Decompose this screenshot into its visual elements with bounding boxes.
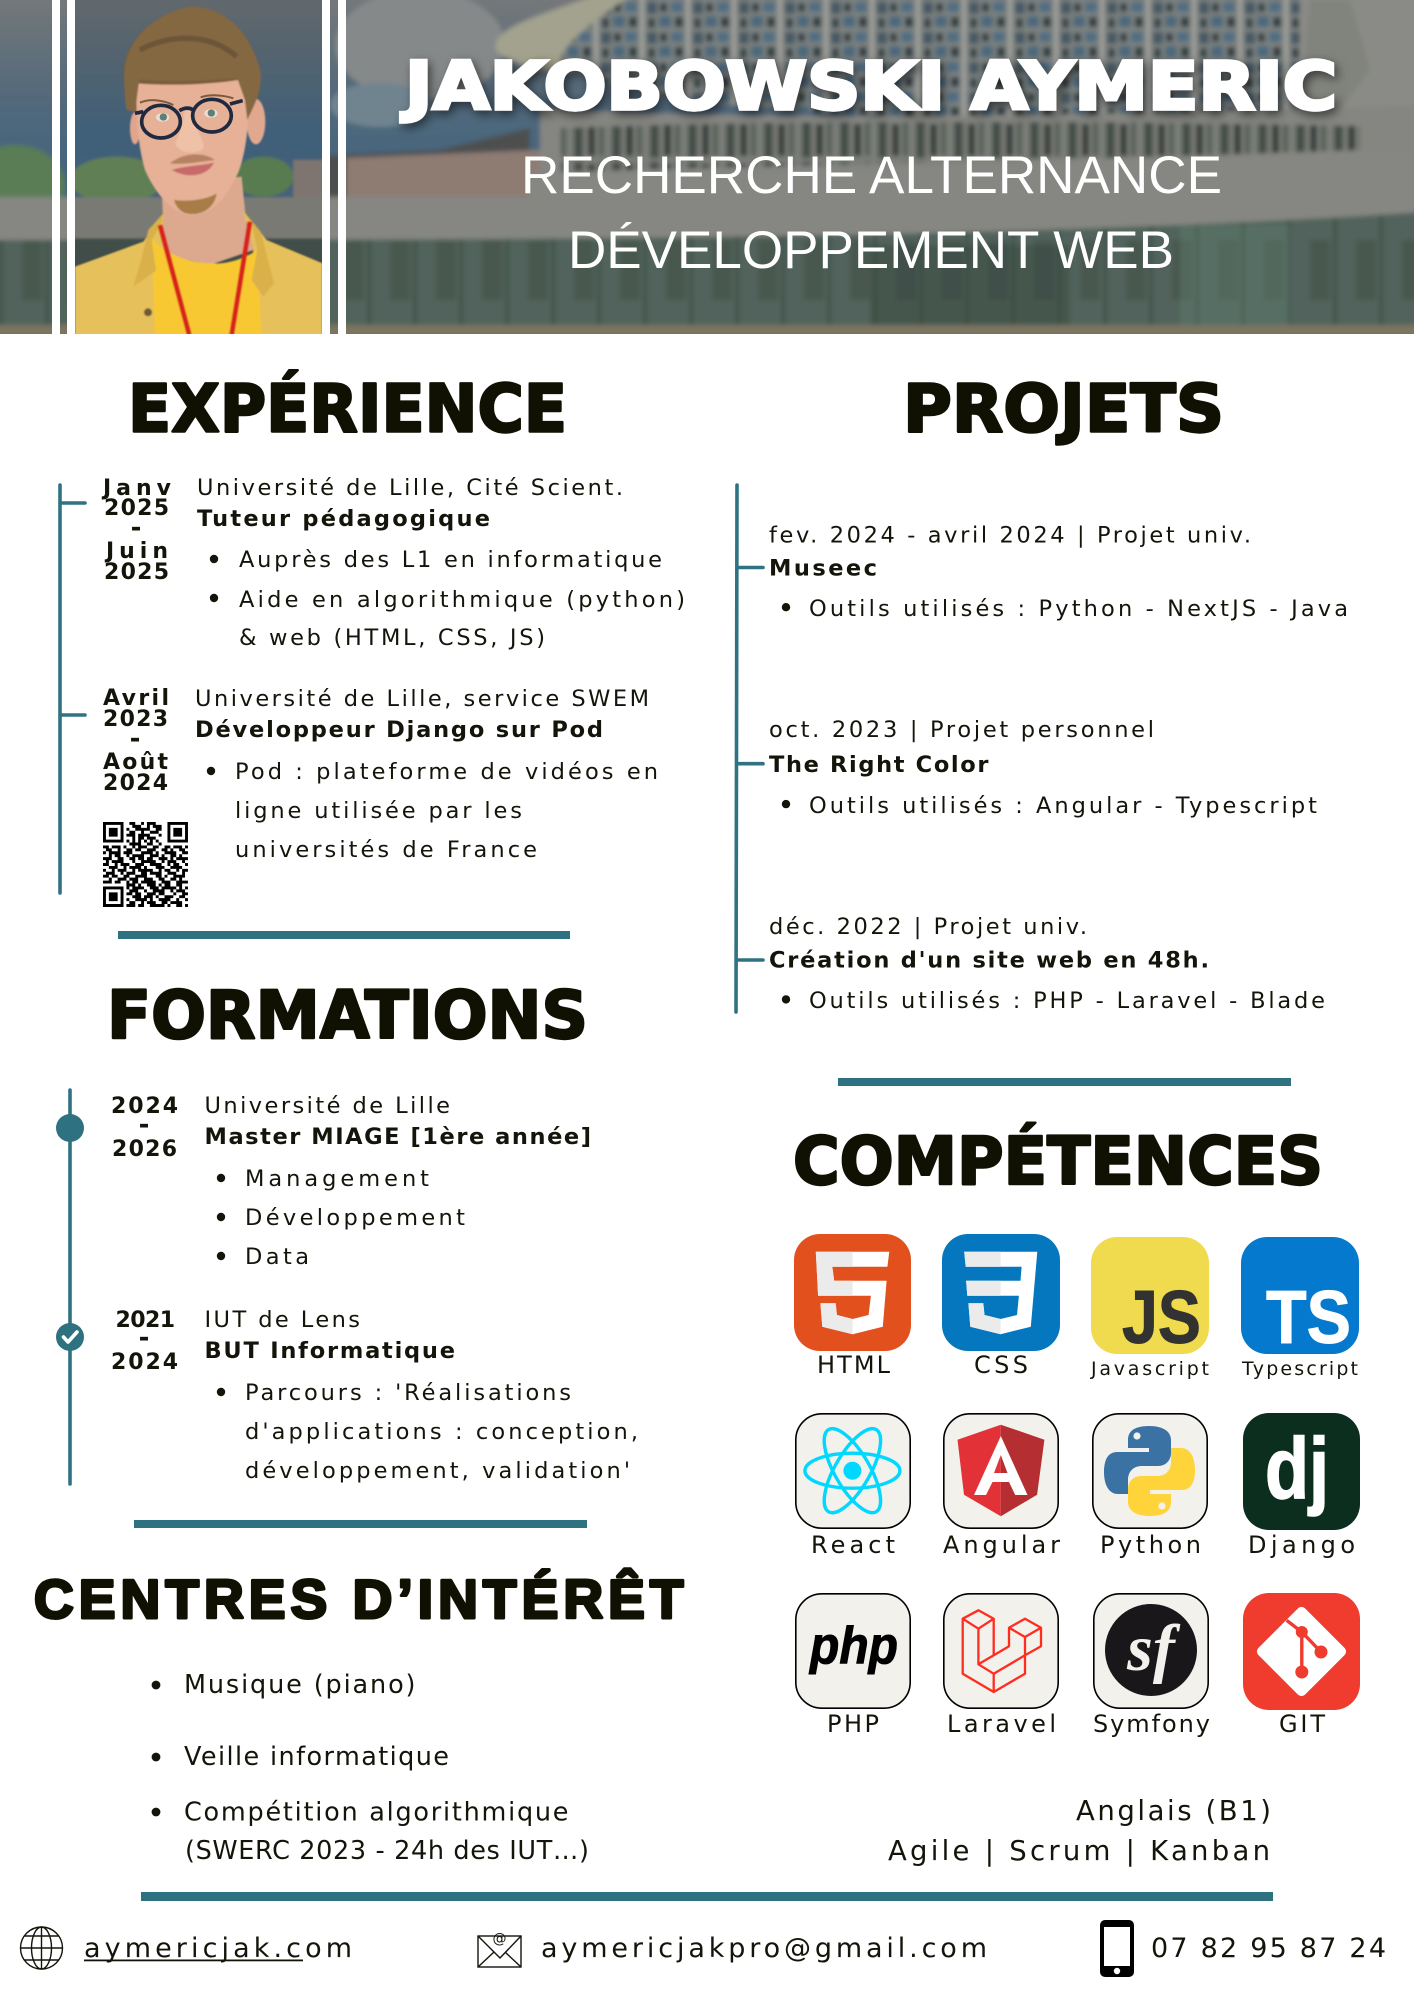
job 2 text: Développeur Django sur Pod [195,717,603,743]
heading: expérience: EXPÉRIENCE [128,370,567,448]
heading: compétences: COMPÉTENCES [793,1122,1323,1200]
heading: centres d'intérêt: CENTRES D’INTÉRÊT [34,1568,684,1630]
project: site web 48h: Outils utilisés : PHP - Laravel - Blade [809,988,1325,1014]
icon labels: Python [1100,1531,1201,1559]
languages and methods: Agile | Scrum | Kanban [888,1835,1270,1867]
BUT text [204,1307,638,1484]
name title: JAKOBOWSKI AYMERIC [401,48,1337,125]
timeline [60,485,85,893]
icon: PHP: php [808,1617,898,1675]
phone number: 07 82 95 87 24 [1151,1933,1386,1964]
icon: Django [1243,1413,1360,1530]
dates: job 1: Juin [104,539,168,564]
icon labels: Angular [943,1531,1060,1559]
project: site web 48h [769,914,1325,1014]
dates: job 2: 2024 [103,771,168,796]
icon: JS [1091,1237,1209,1359]
icon: phone [1100,1920,1134,1977]
project: Museec: Outils utilisés : Python - NextJS - Java [809,596,1348,622]
dates: job 1: 2025 [104,560,169,585]
job 2 text: Pod : plateforme de vidéos en [235,759,658,785]
project: site web 48h: Création d'un site web en 48h. [769,948,1209,974]
icon: CSS [942,1234,1060,1351]
dates: job 2: 2023 [103,707,168,732]
eyes [156,113,169,122]
icon: mail: @ [492,1931,506,1947]
icon labels: React [811,1531,895,1559]
header banner [0,0,1414,344]
master text: Master MIAGE [1ère année] [204,1124,591,1150]
dates: job 1 [101,476,172,585]
list: centres d'intérêt [152,1670,589,1866]
dates: job 1: - [131,513,141,543]
project: site web 48h: déc. 2022 | Projet univ. [769,914,1087,940]
neck [157,177,258,265]
icon: HTML [794,1234,911,1351]
BUT text: IUT de Lens [204,1307,360,1333]
panel: projets [736,485,1348,1014]
job 1 text: Auprès des L1 en informatique [239,547,662,573]
BUT text: d'applications : conception, [245,1419,638,1445]
dates: master: - [139,1110,149,1140]
dates: job 2: Avril [103,686,169,711]
job 2 text: ligne utilisée par les [235,798,522,824]
ears [130,112,140,144]
dates: job 2: Août [103,750,168,775]
job 1 text: Tuteur pédagogique [197,506,490,532]
icon: Python [1093,1414,1207,1528]
heading: formations: FORMATIONS [107,977,588,1054]
icon labels: Django [1248,1531,1355,1559]
glasses [135,99,243,138]
hair front [124,7,261,120]
shirt [75,210,322,337]
job 1 text [197,475,685,651]
icon: Symfony [1094,1594,1208,1708]
project: The Right Color: oct. 2023 | Projet personnel [769,717,1154,743]
icon: JS: JS [1122,1275,1201,1359]
icon: PHP [796,1594,910,1708]
hair back [123,28,259,114]
icon: Symfony: sf [1126,1612,1181,1685]
panel: expérience [60,475,685,907]
icon labels: GIT [1279,1710,1325,1738]
project: The Right Color [769,717,1317,819]
icon: globe [20,1927,62,1969]
master text: Data [245,1244,309,1270]
job 1 text: Aide en algorithmique (python) [239,587,685,613]
dates: job 2 [103,686,169,796]
icon: TS [1241,1237,1359,1359]
icon: React [796,1414,910,1528]
BUT text: développement, validation' [245,1458,630,1484]
timeline [736,485,763,1012]
master text: Développement [245,1205,465,1231]
icon: GIT [1243,1593,1360,1710]
icon labels: Typescript [1241,1358,1358,1380]
t-shirt [152,238,262,337]
icon: mail [478,1931,521,1967]
job 1 text: & web (HTML, CSS, JS) [239,625,545,651]
dates: BUT: 2024 [111,1350,178,1375]
icon labels: HTML [817,1351,891,1379]
job 2 text: Université de Lille, service SWEM [195,686,649,712]
dates: master: 2024 [111,1094,178,1119]
icon labels: CSS [974,1351,1028,1379]
icon labels: Symfony [1093,1710,1210,1738]
BUT text: BUT Informatique [204,1338,455,1364]
job 2 text [195,686,658,863]
job 2 text: universités de France [235,837,537,863]
face [136,78,249,215]
website: aymericjak.com [84,1933,352,1964]
dates: job 1: Janv [101,476,172,501]
timeline with markers [56,1090,84,1484]
list: centres d'intérêt: (SWERC 2023 - 24h des IUT…) [185,1836,589,1866]
frame bars around portrait [52,0,346,334]
heading: projets: PROJETS [903,370,1224,448]
dates: job 1: 2025 [104,496,169,521]
panel: compétences [794,1234,1360,1867]
job 1 text: Université de Lille, Cité Scient. [197,475,623,501]
BUT text: Parcours : 'Réalisations [245,1380,571,1406]
master text: Management [245,1166,429,1192]
project: Museec [769,522,1348,622]
icon labels [811,1351,1358,1738]
footer: contact [20,1920,1386,1977]
email: aymericjakpro@gmail.com [541,1933,987,1964]
icon: Laravel [944,1594,1058,1708]
project: Museec: Museec [769,556,877,582]
dates: BUT: - [139,1323,149,1353]
dates: master: 2026 [112,1137,177,1162]
icon labels: PHP [827,1710,879,1738]
dates: master [111,1094,178,1162]
project: The Right Color: The Right Color [769,752,989,778]
icon: Django: dj [1265,1421,1329,1517]
panel: formations [56,1090,638,1484]
icon labels: Javascript [1090,1358,1209,1380]
icon: Angular [944,1414,1058,1528]
list: centres d'intérêt: Musique (piano) [184,1670,416,1700]
subtitle line 2: DÉVELOPPEMENT WEB [568,221,1174,280]
master text: Université de Lille [204,1093,450,1119]
list: centres d'intérêt: Compétition algorithmique [184,1798,568,1828]
languages and methods [888,1795,1271,1867]
QR code [103,822,188,907]
dates: job 2: - [130,724,140,754]
dates: BUT: 2021 [116,1308,175,1333]
icon labels: Laravel [947,1710,1056,1738]
project: The Right Color: Outils utilisés : Angular - Typescript [809,793,1317,819]
subtitle line 1: RECHERCHE ALTERNANCE [521,146,1222,205]
list: centres d'intérêt: Veille informatique [184,1742,449,1772]
portrait photo [70,0,330,338]
icon: TS: TS [1266,1275,1351,1359]
master text [204,1093,591,1270]
project: Museec: fev. 2024 - avril 2024 | Projet univ. [769,522,1251,548]
dates: BUT [111,1308,178,1375]
languages and methods: Anglais (B1) [1076,1795,1271,1827]
background photo: building [0,0,1414,344]
